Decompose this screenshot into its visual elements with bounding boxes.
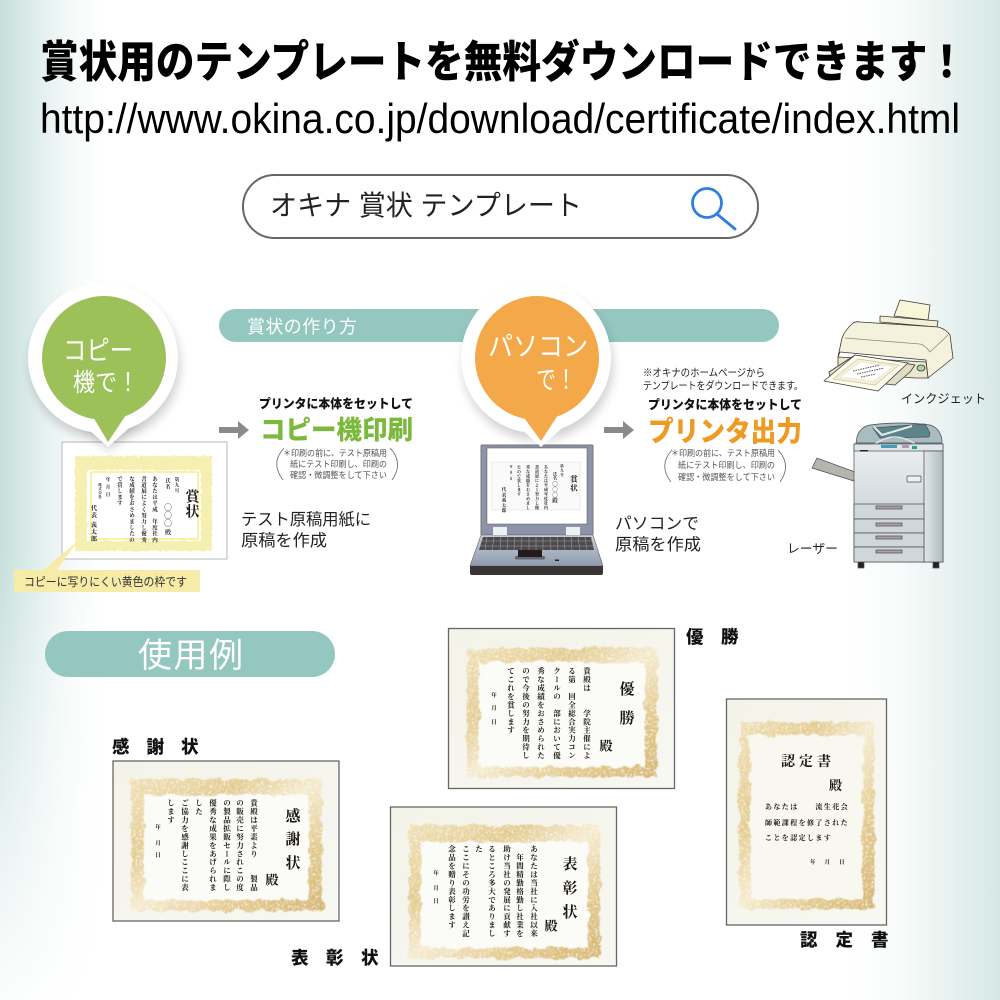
certificate text: 感 [282,807,304,824]
certificate text: 師範課程を修了された [765,818,849,828]
print steps [648,397,802,482]
search box [243,175,758,238]
certificate text: 謝 [282,830,304,846]
certificate text: 日 [432,898,440,905]
certificate text: の販売に努力されこの度 [234,799,246,892]
certificate text: 状 [282,854,304,871]
print heading: プリンタ出力 [648,416,802,447]
label: laser: レーザー [787,542,838,556]
copy caption [241,510,371,550]
certificate text: 彰 [560,879,580,896]
copy caption: テスト原稿用紙に [241,510,371,529]
copy caption: 原稿を作成 [241,531,327,550]
laptop screen text: 賞状 [568,474,580,493]
certificate text: した [194,799,204,816]
band heading: 賞状の作り方 [247,317,357,337]
sheet text: ○○○ [162,503,174,527]
certificate text: 殿 [542,919,560,933]
label: commendation: 表彰状 [291,948,396,968]
icon: magnifier [692,188,735,229]
band: usage examples [45,631,335,677]
label: accreditation: 認定書 [800,930,906,950]
sheet text: で賞します [116,476,124,507]
certificate text: てこれを賞します [505,667,516,735]
download note [643,367,803,392]
print note [665,447,786,482]
bubble: computer: で！ [536,365,576,395]
sheet text: 氏名 [164,477,172,490]
label: inkjet: インクジェット [901,392,986,406]
arrow [219,421,249,439]
sheet text: 第九号 [174,476,180,494]
certificate text: 優秀な成果をあげられま [208,798,218,892]
certificate text: 年 [154,823,162,831]
laptop screen text: 第九号 [559,463,564,478]
certificate text [154,798,304,892]
certificate: winner [448,628,674,788]
print note: 確認・微調整をして下さい [678,471,775,482]
laptop screen text: 秀な成績をおさめまし [525,464,531,510]
print note: ＊印刷の前に、テスト原稿用 [671,447,775,458]
copy steps: プリンタに本体をセットして [259,396,413,411]
sheet text: 株式会社 [97,482,102,499]
certificate text: 貴殿は 学院主催によ [581,666,592,760]
laptop [470,445,603,575]
pc caption: 原稿を作成 [615,535,701,554]
certificate text: 日 [490,719,498,726]
laptop screen text: ○○○殿 [551,481,559,504]
certificate text [765,751,854,866]
certificate text: 日 [154,852,162,859]
certificate text: あなたは 流生花会 [765,802,849,812]
pc caption: パソコンで [615,515,699,533]
copy steps [259,396,413,480]
certificate text: 貴殿は平素より 製品 [248,798,260,892]
certificate text [490,666,638,760]
sheet text: 殿 [164,528,172,536]
certificate text: る第 回全総合実力コン [566,667,578,760]
laptop screen text: 氏名 [552,471,558,481]
sheet text: あなたは平成 年度社内 [151,476,159,544]
print steps: プリンタに本体をセットして [648,397,802,412]
certificate text: 殿 [596,739,616,753]
sheet text: 書道展によく努力し優秀 [140,475,148,544]
certificate text: るところ多大でありまし [486,845,498,938]
certificate text: 秀な成績をおさめられた [535,666,546,760]
sheet text: 賞状 [182,488,202,519]
certificate text: た [474,845,484,853]
bubble: copy machine [28,283,180,452]
arrow [604,421,634,439]
copy note: 紙にテスト印刷し、印刷の [290,458,387,469]
laptop screen text [501,463,580,514]
certificate text: 殿 [262,873,282,887]
copy template sheet [62,442,227,559]
certificate text: 月 [432,884,440,892]
certificate text: 年間精勤格勤し社業を [514,845,526,938]
certificate text: 年 [490,691,498,699]
label: thanks: 感謝状 [112,737,216,757]
certificate: commendation [390,807,616,966]
certificate text: 月 [154,839,162,847]
bubble: copy machine: 機で！ [73,369,139,397]
copy heading: コピー機印刷 [260,415,413,445]
laptop screen text: 書道展によく努力し優 [534,464,540,510]
certificate text: 月 [490,704,498,712]
certificate text: 殿 [829,775,842,794]
bubble: computer [461,283,613,447]
band heading: 使用例 [138,637,243,675]
laptop screen text: あなたは平成年度社内 [543,464,549,510]
certificate text: 念品を贈り表彰します [446,844,458,930]
print note: 紙にテスト印刷し、印刷の [678,459,775,470]
certificate text: 年 [432,869,440,877]
certificate text: の製品拡販セールに際し [221,799,232,892]
certificate text: あなたは当社に入社以来 [528,845,540,938]
download note: テンプレートをダウンロードできます。 [643,379,803,392]
laptop screen text: たので賞します [516,464,522,497]
sheet text: な成績をおさめましたの [128,476,136,543]
icon: laser printer [812,423,943,568]
certificate: accreditation [726,699,886,925]
certificate text: 認定書 [781,751,835,771]
callout: yellow frame note: コピーに写りにくい黄色の枠です [24,575,187,589]
certificate text: ここにその功労を讃え記 [460,845,472,938]
bubble text: コピー [63,336,133,366]
certificate text: 助け当社の発展に貢献す [501,844,512,938]
icon: inkjet printer [824,300,953,391]
label: winner: 優勝 [686,627,756,647]
certificate text: 年月日 [810,858,854,866]
certificate text: ので今後の努力を期待し [520,667,532,760]
band: how to make [219,309,779,342]
download note: ※オキナのホームページから [643,367,765,379]
certificate text: クールの 部において優 [552,667,562,760]
certificate text: ことを認定します [765,833,832,843]
certificate text: 勝 [616,710,638,726]
yellow frame [75,456,212,551]
laptop screen text: 代表義太郎 [501,486,507,514]
certificate text: 優 [616,680,638,696]
certificate text [432,844,580,938]
certificate: thanks [113,761,339,921]
laptop screen text: 年月日 [509,464,513,483]
pc caption [615,515,701,554]
bubble text: パソコン [488,332,588,362]
callout: yellow frame note [14,541,200,592]
certificate text: ご協力を感謝しここに表 [180,799,190,892]
sheet text: 代表 義太郎 [90,504,98,543]
sheet text: 年月日 [105,476,111,500]
copy note [277,447,398,480]
sheet text [90,475,202,544]
copy note: ＊印刷の前に、テスト原稿用 [283,447,387,458]
certificate text: 状 [560,903,580,920]
certificate text: 表 [560,855,580,872]
certificate text: します [166,799,176,824]
copy note: 確認・微調整をして下さい [290,469,387,480]
search keywords: オキナ 賞状 テンプレート [270,190,582,221]
